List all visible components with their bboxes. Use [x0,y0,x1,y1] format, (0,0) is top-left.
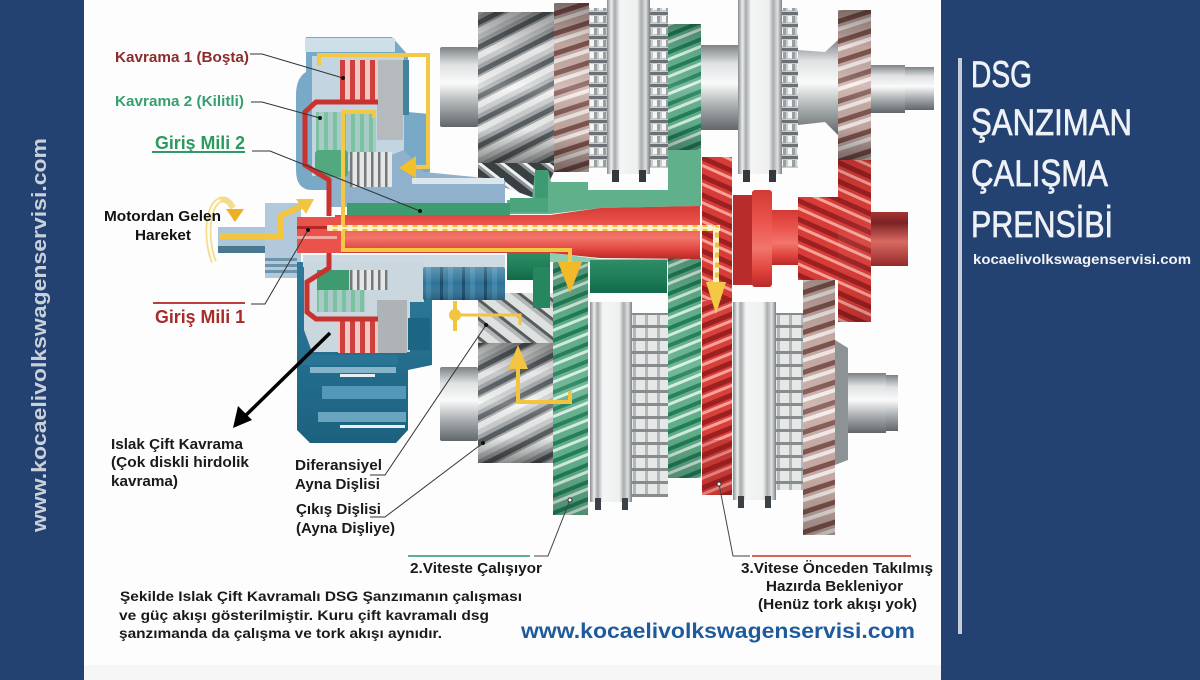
upper output shaft [440,0,934,200]
rotation arrow [208,199,244,262]
clutch springs upper [350,152,392,187]
label: Kavrama 2: Kavrama 2 (Kilitli) [115,94,244,110]
label: Motordan Gelen Hareket [104,209,221,244]
label: Motordan Gelen Hareket: Motordan Gelen [104,209,221,225]
label: Islak Çift Kavrama [111,437,250,490]
panel title [971,54,1132,245]
label: 3. Vitese Önceden Takılmış: (Henüz tork akışı yok) [758,597,917,613]
clutch 1 lower red discs [338,320,378,353]
panel title: ŞANZIMAN [971,102,1132,143]
right navy panel [941,0,1200,680]
green hollow input shaft and gears [507,150,701,515]
clutch springs lower [350,270,388,290]
explanatory note [119,588,522,641]
green strip [347,203,510,215]
left navy band [0,0,84,680]
label: 3. Vitese Önceden Takılmış: 3.Vitese Önceden Takılmış [741,560,933,577]
label: 3. Vitese Önceden Takılmış: Hazırda Bekleniyor [766,579,903,595]
panel title: PRENSİBİ [971,204,1113,245]
red clutch carrier [305,102,378,216]
label: 3. Vitese Önceden Takılmış [741,555,933,613]
lower casing [297,262,432,443]
label: Giriş Mili 2: Giriş Mili 2 [155,133,245,153]
label: Çıkış Dişlisi: Çıkış Dişlisi [296,502,381,518]
power flow: clutch 2 to second gear [343,112,582,293]
blue shift sleeve [423,267,505,300]
clutch 2 lower green discs [317,290,365,312]
website footer: www.kocaelivolkswagenservisi.com [520,620,915,643]
label: Diferansiyel Ayna Dişlisi: Ayna Dişlisi [295,477,380,493]
label: 2. Viteste Çalışıyor: 2.Viteste Çalışıyor [410,561,542,577]
power flow: engine input arrow [219,199,314,236]
label: Motordan Gelen Hareket: Hareket [135,228,191,244]
label: Islak Çift Kavrama: (Çok diskli hirdolik [111,455,250,471]
label: Diferansiyel Ayna Dişlisi [295,458,382,493]
label: Kavrama 1: Kavrama 1 (Boşta) [115,50,249,66]
power flow: clutch 1 idle path [319,55,428,178]
background [84,0,941,680]
shift fork [449,301,520,331]
black arrow to wet dual clutch [233,333,330,428]
upper casing [296,37,505,207]
explanatory note: Şekilde Islak Çift Kavramalı DSG Şanzımanın çalışması [120,588,522,604]
explanatory note: ve güç akışı gösterilmiştir. Kuru çift kavramalı dsg [119,607,489,623]
leader lines [250,54,750,556]
power flow: preselected third gear dotted path [327,225,726,314]
explanatory note: şanzımanda da çalışma ve tork akışı aynıdır. [119,625,442,641]
label: Giriş Mili 1: Giriş Mili 1 [155,307,245,327]
lower output shaft [440,275,898,535]
vertical website text: www.kocaelivolkswagenservisi.com [29,138,51,533]
power flow: output arrow [508,345,570,402]
transmission diagram [208,0,934,535]
label: Islak Çift Kavrama: Islak Çift Kavrama [111,437,244,453]
label: Çıkış Dişlisi: (Ayna Dişliye) [296,521,395,537]
label: 2. Viteste Çalışıyor [408,555,542,577]
red solid input shaft and gears [335,157,908,495]
panel title: ÇALIŞMA [971,153,1108,194]
label: Islak Çift Kavrama: kavrama) [111,474,178,490]
wet dual clutch housing [218,37,510,443]
label: Çıkış Dişlisi [296,502,395,537]
panel title: DSG [971,54,1032,95]
panel website: kocaelivolkswagenservisi.com [973,251,1191,267]
input shaft [218,203,301,278]
clutch 2 upper green discs [316,112,376,154]
clutch 1 upper red discs [340,60,378,102]
label: Diferansiyel Ayna Dişlisi: Diferansiyel [295,458,382,474]
